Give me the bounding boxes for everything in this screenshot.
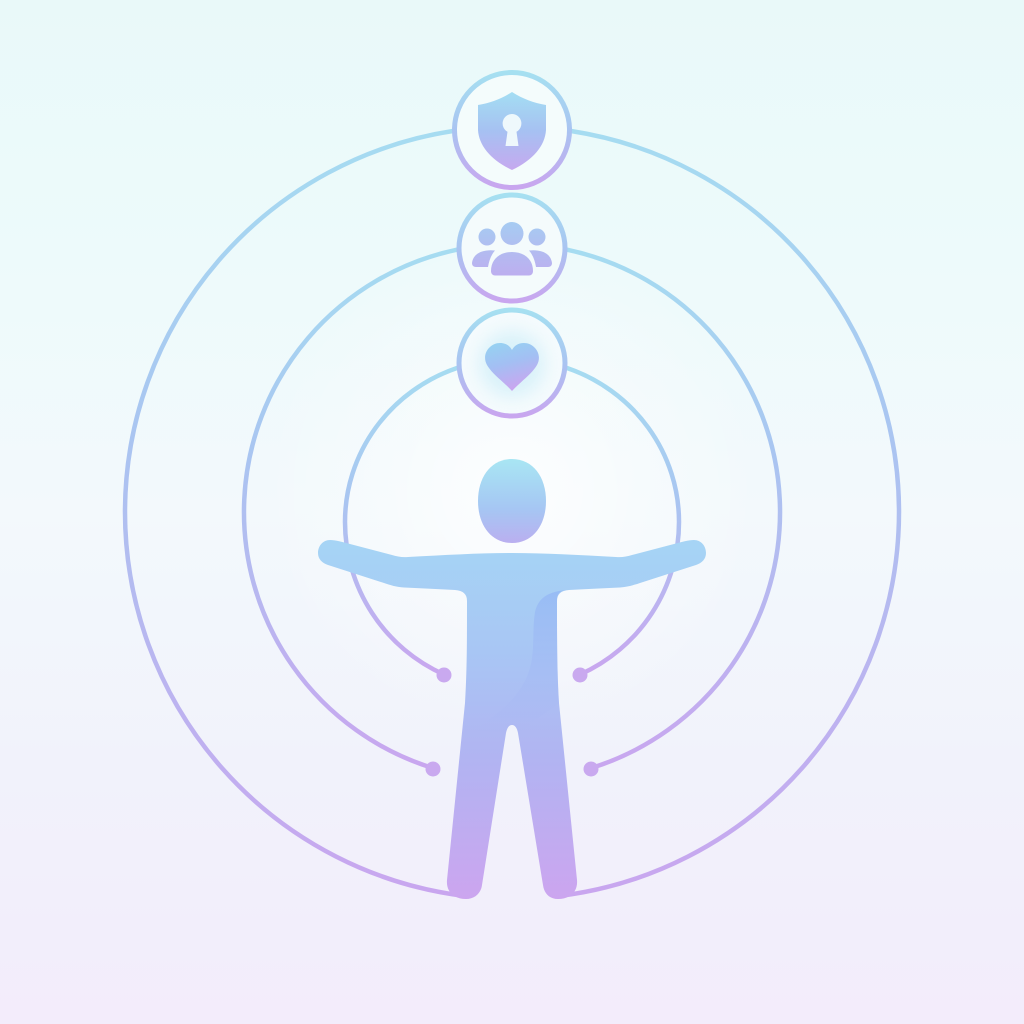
figure head bbox=[478, 459, 546, 543]
figure body with outstretched arms bbox=[318, 540, 706, 899]
icon badge: shield with keyhole bbox=[454, 72, 570, 188]
middle ring arcs bbox=[244, 250, 780, 776]
torso shading bbox=[472, 590, 566, 733]
outer ring arcs bbox=[125, 131, 899, 896]
icon badge: heart bbox=[459, 310, 565, 416]
human figure bbox=[318, 459, 706, 899]
icon: shield bbox=[478, 92, 546, 170]
icon badge: community group bbox=[459, 195, 565, 301]
central glow bbox=[262, 240, 762, 740]
icon: keyhole bbox=[503, 114, 521, 146]
inner ring arcs bbox=[345, 368, 679, 682]
icon: three people bbox=[472, 222, 552, 276]
heart glow bbox=[479, 331, 545, 397]
icon: heart bbox=[485, 343, 539, 391]
